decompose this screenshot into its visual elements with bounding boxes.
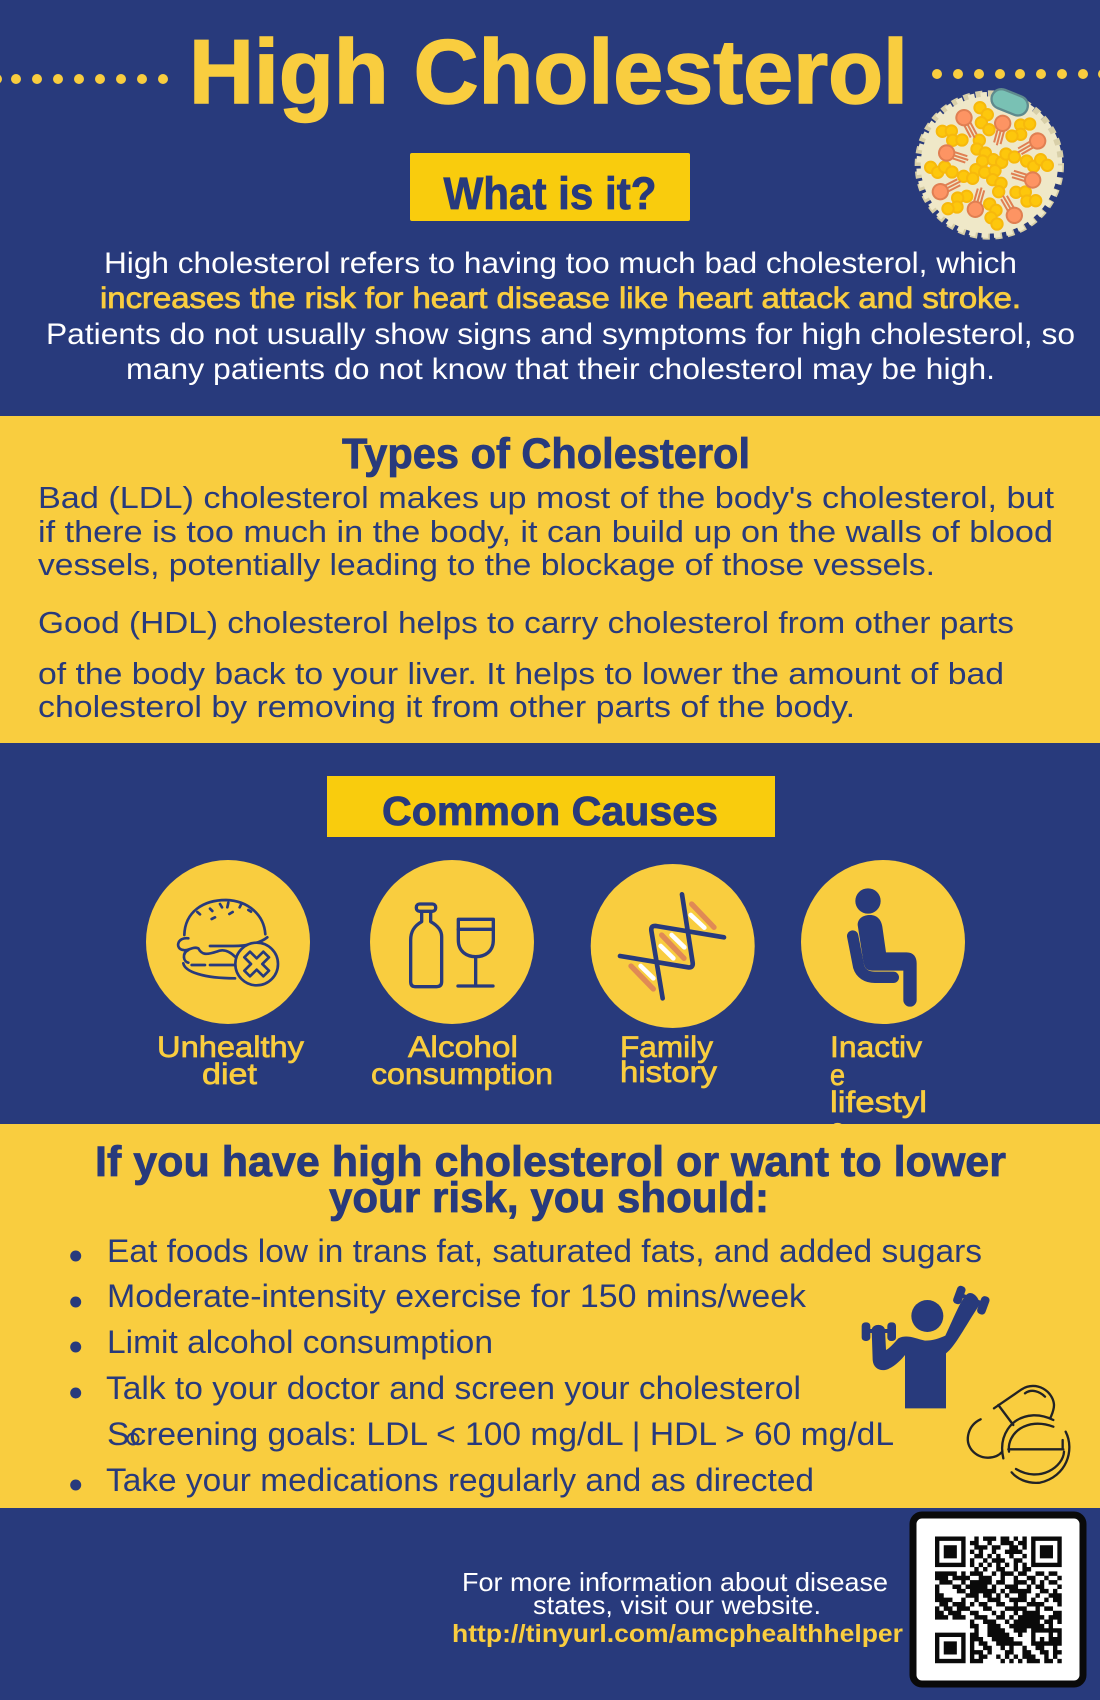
label: family history	[620, 1031, 717, 1089]
bullet list	[70, 1233, 982, 1498]
label: alcohol consumption: consumption	[371, 1058, 553, 1091]
label: alcohol consumption: Alcohol	[408, 1031, 518, 1064]
label: alcohol consumption	[371, 1031, 553, 1091]
panel: types of cholesterol	[0, 416, 1100, 743]
icon: alcohol bottle and glass	[370, 860, 534, 1024]
text block: HDL: Good (HDL) cholesterol helps to carry cholesterol from other parts	[38, 605, 1014, 640]
heading box: what is it: What is it?	[444, 168, 656, 219]
bullet list: Limit alcohol consumption	[107, 1324, 493, 1360]
label: family history: history	[620, 1056, 717, 1089]
text block: website info: For more information about disease	[462, 1567, 888, 1597]
left dotted decoration	[0, 74, 168, 84]
label: inactive lifestyle: e	[830, 1113, 845, 1146]
text block: LDL	[38, 480, 1054, 582]
bullet list: Talk to your doctor and screen your cholesterol	[106, 1370, 801, 1406]
text block: LDL: Bad (LDL) cholesterol makes up most of the body's cholesterol, but	[38, 480, 1054, 515]
heading: types of cholesterol: Types of Cholesterol	[342, 430, 750, 478]
text block: definition	[46, 247, 1075, 386]
heading box: common causes	[327, 776, 775, 837]
panel: common causes	[0, 743, 1100, 1146]
heading: what you should do	[95, 1138, 1006, 1222]
text block: LDL: if there is too much in the body, it can build up on the walls of blood	[38, 514, 1053, 549]
label: family history: Family	[620, 1031, 713, 1064]
right dotted decoration	[932, 69, 1100, 79]
label: unhealthy diet: diet	[202, 1058, 258, 1091]
text block: website info	[452, 1567, 903, 1648]
label: unhealthy diet	[157, 1031, 304, 1091]
panel: header and what is it	[0, 0, 1100, 416]
heading: what you should do: your risk, you should:	[329, 1174, 769, 1222]
label: unhealthy diet: Unhealthy	[157, 1031, 304, 1064]
icon: inactive lifestyle seated person	[801, 860, 965, 1024]
bullet list: Take your medications regularly and as directed	[106, 1462, 814, 1498]
heading box: what is it	[410, 153, 690, 221]
icon: family history dna	[591, 864, 755, 1028]
label: inactive lifestyle: lifestyl	[830, 1086, 927, 1119]
text block: definition: Patients do not usually show signs and symptoms for high cholesterol, so	[46, 318, 1075, 351]
bullet list: Screening goals: LDL < 100 mg/dL | HDL > 60 mg/dL	[107, 1416, 894, 1452]
label: inactive lifestyle	[830, 1031, 927, 1146]
text block: HDL: of the body back to your liver. It helps to lower the amount of bad	[38, 656, 1004, 691]
text block: definition: High cholesterol refers to having too much bad cholesterol, which	[104, 247, 1017, 280]
panel: footer	[0, 1508, 1100, 1700]
text block: definition: increases the risk for heart disease like heart attack and stroke.	[100, 282, 1021, 315]
title: High Cholesterol	[189, 22, 908, 123]
text block: HDL	[38, 605, 1014, 724]
bullet list: Moderate-intensity exercise for 150 mins/week	[107, 1278, 807, 1314]
text block: website info: http://tinyurl.com/amcphealthhelper	[452, 1620, 903, 1648]
text block: website info: states, visit our website.	[533, 1590, 821, 1620]
heading box: common causes: Common Causes	[382, 788, 718, 834]
icon: person lifting dumbbells	[862, 1285, 991, 1408]
label: inactive lifestyle: e	[830, 1059, 845, 1092]
panel: recommendations	[0, 1124, 1100, 1508]
icon: unhealthy diet burger	[146, 860, 310, 1024]
qr code	[913, 1515, 1083, 1684]
icon: medication pills	[968, 1386, 1069, 1483]
text block: LDL: vessels, potentially leading to the blockage of those vessels.	[38, 547, 935, 582]
heading: what you should do: If you have high cholesterol or want to lower	[95, 1138, 1006, 1186]
label: inactive lifestyle: Inactiv	[830, 1031, 922, 1064]
icon: cholesterol particle	[918, 94, 1060, 236]
text block: HDL: cholesterol by removing it from other parts of the body.	[38, 689, 855, 724]
bullet list: Eat foods low in trans fat, saturated fats, and added sugars	[107, 1233, 982, 1269]
text block: definition: many patients do not know that their cholesterol may be high.	[126, 353, 995, 386]
